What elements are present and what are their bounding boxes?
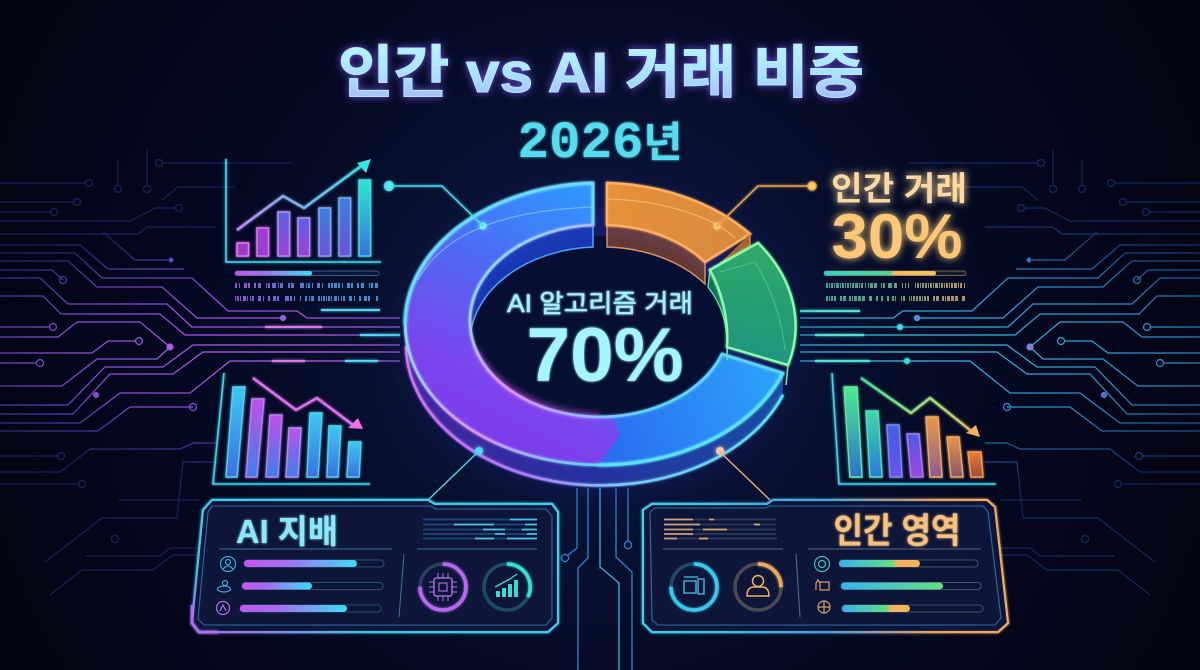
label: human percent: 30% bbox=[832, 202, 962, 272]
AI segment outlines bbox=[405, 183, 783, 465]
title: 인간 vs AI 거래 비중 bbox=[338, 41, 864, 105]
panel title: 인간 영역 bbox=[834, 512, 960, 551]
donut chart bbox=[375, 168, 825, 512]
label: human trade: 인간 거래 bbox=[831, 170, 967, 207]
small icons bbox=[814, 556, 830, 613]
AI label: AI 알고리즘 거래 bbox=[507, 290, 693, 318]
year: 2026년 bbox=[518, 114, 682, 173]
inner magenta band bbox=[476, 350, 600, 416]
panel: AI dominance bbox=[192, 500, 558, 632]
chart: falling bars left bbox=[213, 373, 370, 484]
human progress and barcodes bbox=[824, 271, 968, 298]
circuit highlights bbox=[265, 310, 910, 364]
AI percent: 70% bbox=[526, 313, 684, 398]
green segment bbox=[708, 270, 727, 360]
panel title: AI 지배 bbox=[236, 513, 338, 550]
callout line: top left bbox=[384, 182, 483, 226]
orange segment bbox=[607, 183, 750, 262]
chart: rising bars bbox=[226, 159, 381, 298]
AI segment inner wall bbox=[470, 225, 593, 343]
circuit traces: right bbox=[800, 150, 1200, 595]
chart: falling bars right bbox=[832, 373, 996, 484]
circuit traces: left bbox=[0, 150, 400, 595]
callout line: bottom right bbox=[720, 452, 770, 500]
progress bars bbox=[240, 560, 384, 612]
icon: growth ring bbox=[484, 564, 530, 610]
orange inner wall bbox=[607, 225, 705, 284]
data streaks bbox=[664, 520, 777, 538]
panel: human domain bbox=[643, 500, 1008, 632]
AI segment surface bbox=[405, 183, 783, 465]
callout dots on donut bbox=[475, 222, 724, 455]
icon: chip ring bbox=[420, 564, 466, 610]
AI segment side wall bbox=[405, 324, 783, 487]
icon: person ring bbox=[735, 564, 781, 610]
small icons bbox=[216, 556, 236, 614]
AI segment lower edge bbox=[406, 346, 783, 485]
callout line: top right bbox=[717, 182, 816, 226]
donut glow bbox=[375, 168, 825, 512]
data streaks bbox=[423, 520, 537, 538]
callout line: bottom left bbox=[428, 451, 479, 500]
center bottom traces bbox=[561, 488, 632, 670]
icon: devices ring bbox=[671, 564, 717, 610]
inner hole bbox=[470, 236, 730, 428]
AI segment front section bbox=[598, 354, 783, 465]
progress bars bbox=[839, 560, 983, 612]
